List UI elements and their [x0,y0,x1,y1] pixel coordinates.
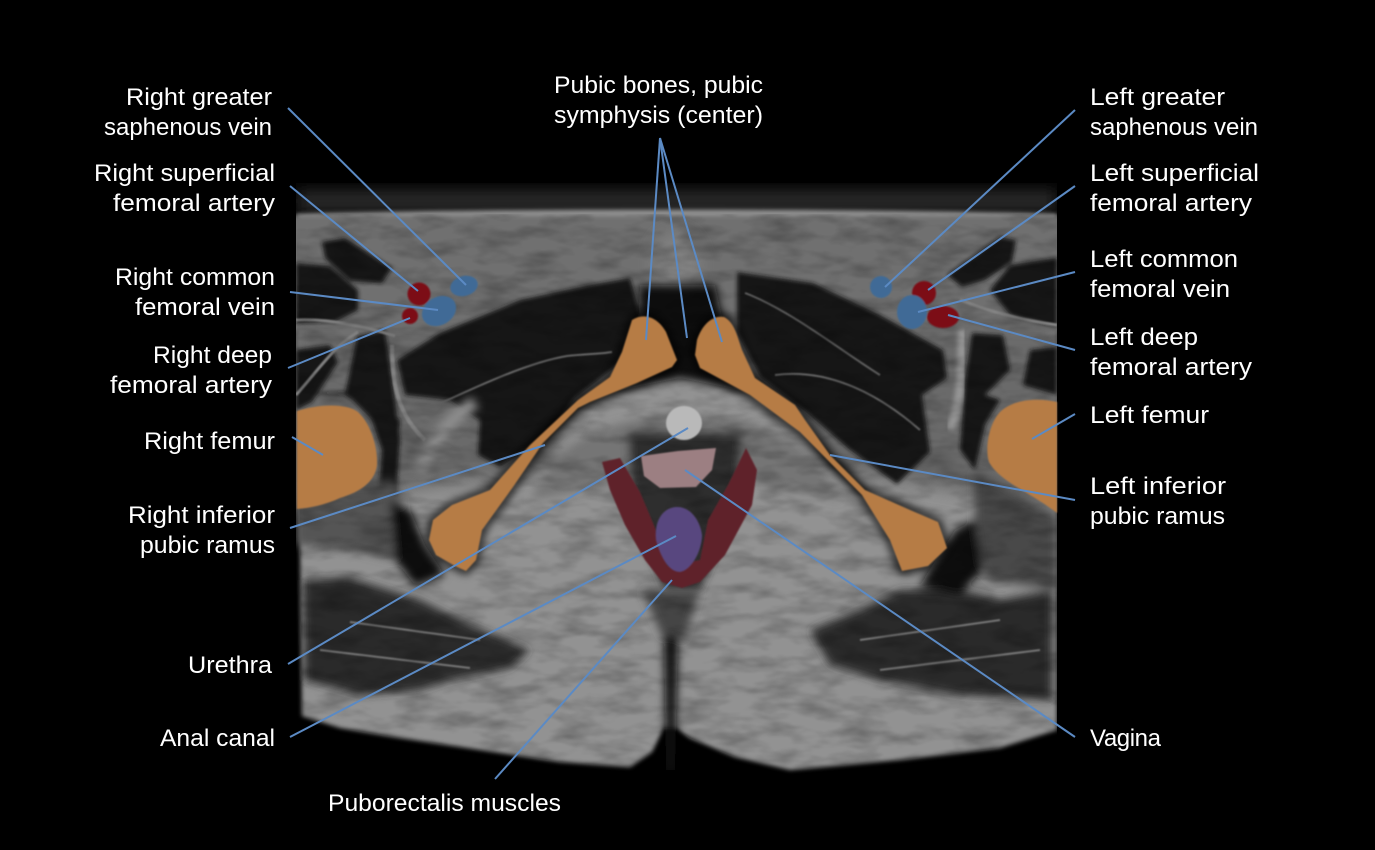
lighter mons at midline [652,234,700,285]
right femur [297,405,377,509]
label: urethra: Urethra [188,652,273,679]
label: right femur: Right femur [144,428,275,455]
label: left common femoral vein: femoral vein [1090,276,1230,303]
urethra [666,406,702,440]
label: left inferior pubic ramus: Left inferior [1090,473,1226,500]
label: left common femoral vein [1090,246,1238,303]
label: pubic bones, pubic symphysis [554,72,763,129]
anal canal [656,507,702,572]
label: left deep femoral artery: femoral artery [1090,354,1252,381]
label: right inferior pubic ramus: Right inferior [128,502,275,529]
label: right greater saphenous vein: Right greater [126,84,272,111]
left femur [987,400,1057,513]
label: anal canal: Anal canal [160,725,275,752]
MRI axial scan background [290,190,1060,774]
label: puborectalis muscles: Puborectalis muscles [328,790,561,817]
label: left greater saphenous vein: saphenous vein [1090,114,1258,141]
left femoral vessels [870,276,959,329]
label: right deep femoral artery: femoral artery [110,372,272,399]
left muscle fascia and bright band [296,320,612,470]
label: left inferior pubic ramus [1090,473,1226,530]
label: left inferior pubic ramus: pubic ramus [1090,503,1225,530]
label: left superficial femoral artery [1090,160,1259,217]
label: right inferior pubic ramus [128,502,275,559]
label: right deep femoral artery [110,342,272,399]
label: right common femoral vein: Right common [115,264,275,291]
label: right greater saphenous vein: saphenous vein [104,114,272,141]
label: left deep femoral artery: Left deep [1090,324,1198,351]
left thigh muscles [296,238,642,505]
label: right inferior pubic ramus: pubic ramus [140,532,275,559]
right femoral vessels [402,273,480,332]
label: left greater saphenous vein: Left greater [1090,84,1225,111]
puborectalis muscles [602,448,757,588]
label: left deep femoral artery [1090,324,1252,381]
label: right common femoral vein [115,264,275,321]
dark margin around bones [429,316,947,571]
gluteal muscle and deep dark regions [296,470,1057,770]
central pelvic dark zone [530,285,840,590]
label: left greater saphenous vein [1090,84,1258,141]
fat texture [296,214,1057,774]
vagina [641,448,716,488]
label: vagina: Vagina [1090,725,1162,752]
label: right superficial femoral artery: femoral artery [113,190,275,217]
label: right superficial femoral artery [94,160,275,217]
label: pubic bones, pubic symphysis: symphysis (center) [554,102,763,129]
label: left superficial femoral artery: femoral artery [1090,190,1252,217]
gluteal streaks [320,620,1040,670]
label: right greater saphenous vein [104,84,272,141]
pubic bones and inferior pubic rami [429,316,947,571]
label: right deep femoral artery: Right deep [153,342,272,369]
outer thigh soft tissue bands [296,330,580,514]
right thigh muscles [737,237,1057,484]
label: right superficial femoral artery: Right superficial [94,160,275,187]
label: left femur: Left femur [1090,402,1209,429]
label: pubic bones, pubic symphysis: Pubic bones, pubic [554,72,763,99]
label: right common femoral vein: femoral vein [135,294,275,321]
label: left common femoral vein: Left common [1090,246,1238,273]
label: left superficial femoral artery: Left superficial [1090,160,1259,187]
leader lines [288,108,1075,779]
right muscle fascia and bright band [745,293,1057,430]
